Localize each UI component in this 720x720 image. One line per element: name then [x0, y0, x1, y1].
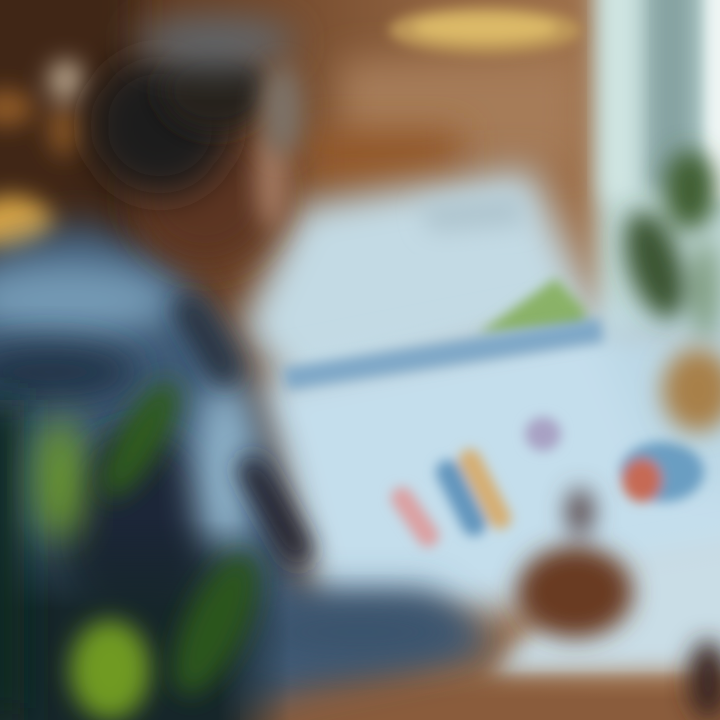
left lamps and lights — [0, 60, 84, 256]
report: green area chart — [478, 278, 585, 334]
ceiling lamp — [389, 6, 581, 54]
foreground plant at lower left — [0, 372, 290, 720]
report: bar chart — [402, 460, 500, 536]
window on the right — [596, 0, 720, 340]
papers and table at lower right — [240, 530, 720, 720]
report: upper page heading block — [420, 195, 525, 232]
hand holding a pen — [517, 488, 633, 638]
report: upper page — [238, 168, 600, 400]
plant pot — [662, 348, 720, 432]
right plant — [613, 150, 719, 340]
report: pie chart — [620, 442, 704, 502]
man: head — [90, 16, 304, 265]
man: torso in blue shirt — [0, 220, 500, 720]
report: blue band — [282, 318, 604, 390]
man: tie — [190, 310, 298, 550]
report: lower page — [255, 310, 720, 620]
report: purple dot — [525, 417, 561, 451]
